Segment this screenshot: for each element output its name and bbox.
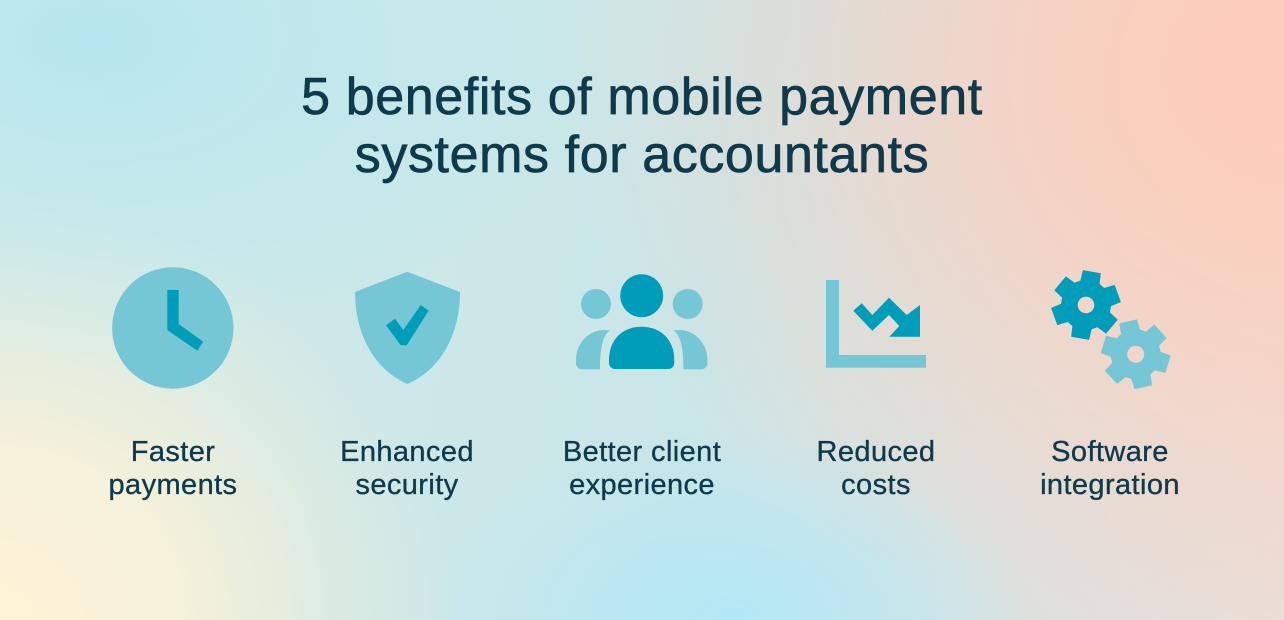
label: reduced costs: costs xyxy=(841,469,911,501)
label: faster payments: Faster xyxy=(131,436,215,468)
label: reduced costs xyxy=(817,436,935,501)
title xyxy=(301,68,983,184)
label: faster payments xyxy=(109,436,237,501)
icon: gears xyxy=(1047,266,1176,395)
icon: clock xyxy=(112,267,234,389)
icon: falling cost chart xyxy=(826,280,926,368)
label: better client experience: Better client xyxy=(563,436,721,468)
icon: shield with check xyxy=(355,272,460,384)
label: better client experience: experience xyxy=(569,469,715,501)
label: software integration xyxy=(1040,436,1180,501)
label: reduced costs: Reduced xyxy=(817,436,935,468)
label: enhanced security: security xyxy=(355,469,459,501)
label: software integration: Software xyxy=(1051,436,1169,468)
label: software integration: integration xyxy=(1040,469,1180,501)
label: better client experience xyxy=(563,436,721,501)
label: faster payments: payments xyxy=(109,469,237,501)
title: systems for accountants xyxy=(355,126,929,184)
icon: client group xyxy=(576,274,707,369)
label: enhanced security: Enhanced xyxy=(340,436,474,468)
title: 5 benefits of mobile payment xyxy=(301,68,983,126)
label: enhanced security xyxy=(340,436,474,501)
